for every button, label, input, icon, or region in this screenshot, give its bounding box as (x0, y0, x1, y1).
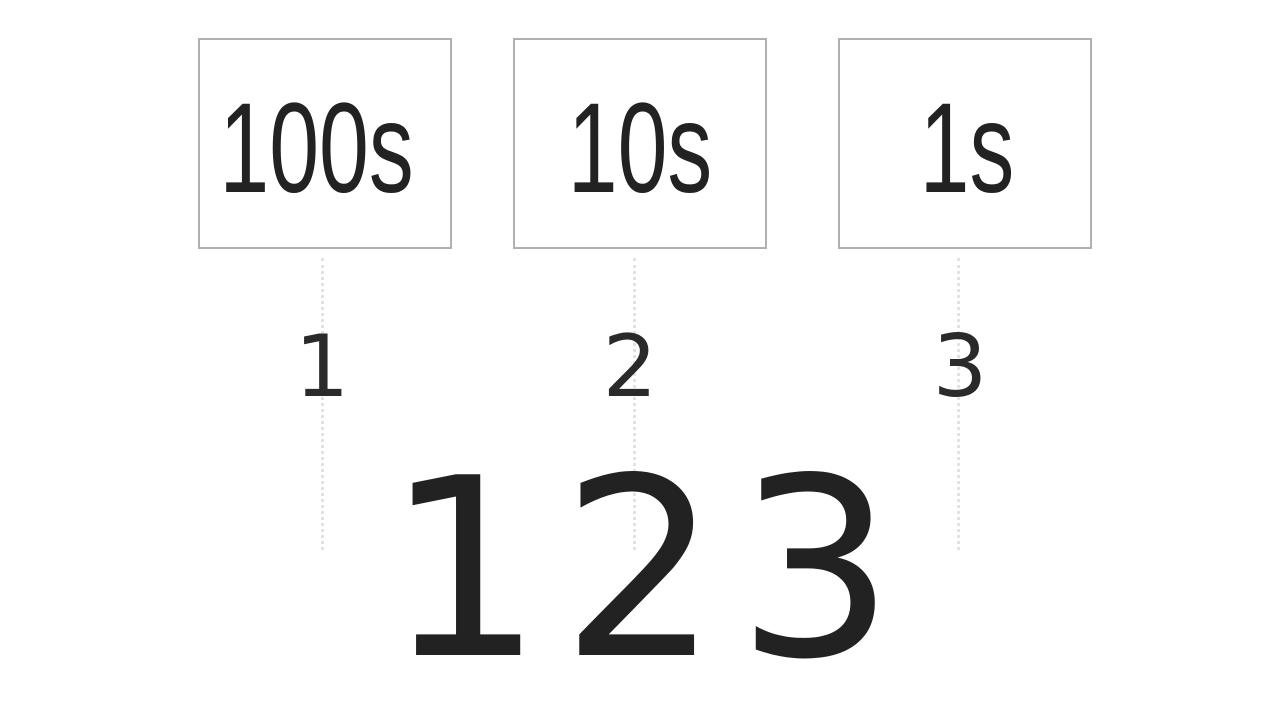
dotted line: column 1 (321, 258, 324, 550)
box: 10s: 10s (568, 77, 712, 220)
box: 100s: 100s (219, 77, 414, 220)
dotted line: column 3 (957, 258, 960, 550)
box: 10s (513, 38, 767, 249)
box: 1s (838, 38, 1092, 249)
digit label 3: 3 (933, 317, 987, 417)
dotted line: column 2 (633, 258, 636, 550)
box: 1s: 1s (920, 77, 1014, 220)
digit label 2: 2 (603, 317, 657, 417)
digit label 1: 1 (295, 317, 349, 417)
box: 100s (198, 38, 452, 249)
big number 123: 123 (385, 426, 913, 714)
